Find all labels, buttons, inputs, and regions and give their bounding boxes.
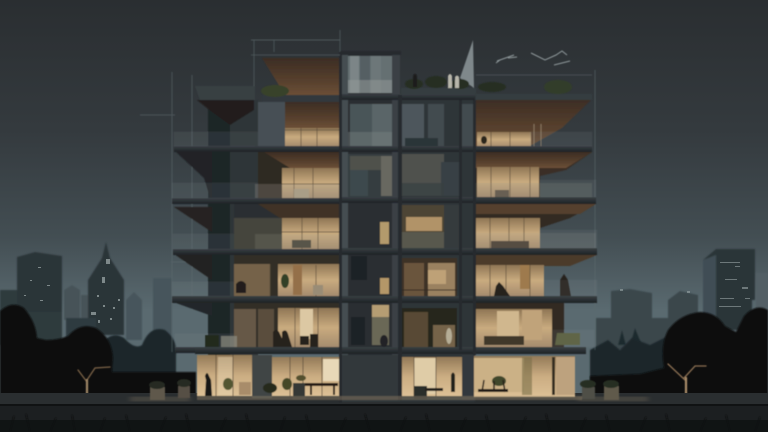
right wing: floor 3: [476, 204, 596, 249]
right wing: floor 4 soffit: [476, 152, 592, 197]
entrance lights on ground: [197, 396, 582, 400]
left wing: dark columns: [208, 105, 230, 355]
pavement: [0, 393, 768, 405]
left wing: floor 3: [234, 204, 340, 249]
right wing: balcony glass rails: [530, 132, 597, 347]
right wing: floor 1: [476, 303, 580, 347]
skyline: left city silhouettes: [0, 242, 172, 345]
skyline: right city silhouettes: [596, 249, 768, 350]
planter pots: [149, 379, 619, 400]
roof: terrace slabs: [401, 88, 592, 100]
skyline: left building lights: [24, 259, 120, 323]
left wing: outer slabs and undersides: [172, 146, 258, 353]
ground floor: concrete pier: [252, 355, 272, 398]
left wing: floor 4 window: [255, 168, 340, 198]
ground floor: left glazing: [197, 355, 252, 396]
right wing: top terrace soffit: [476, 99, 592, 146]
mid-ground tree line: right: [590, 335, 690, 395]
pavement light pools: [130, 397, 648, 401]
central tower: cap: [340, 51, 401, 55]
right wing: floor 4 window: [476, 167, 592, 197]
right wing: ground floor: [474, 356, 575, 397]
pavement edge and foreground ground: [0, 404, 768, 432]
central tower: horizontal slabs: [340, 94, 477, 354]
left wing: concrete tower piece: [258, 102, 285, 146]
central tower: ground floor lobby: [340, 355, 474, 402]
mid-ground tree line: left: [100, 329, 176, 395]
central tower: left column: [340, 52, 400, 402]
right wing: floor 5 window: [477, 124, 541, 147]
left wing: floor 4 soffit: [258, 152, 340, 198]
left wing: floor 5 ceiling: [285, 102, 340, 128]
birds: [496, 51, 570, 65]
central tower: mid windows column: [348, 104, 392, 347]
left wing: outer balcony backdrop: [208, 100, 258, 356]
scaffolding masts: [140, 30, 595, 352]
left wing: floor 1: [205, 303, 340, 347]
left wing: floor 5 window: [285, 128, 340, 146]
central tower: right column windows: [402, 104, 473, 347]
left wing: top cantilever box: [195, 86, 255, 125]
central tower: vertical piers: [339, 52, 476, 402]
foreground tree: right lit trunk: [668, 364, 706, 397]
central tower: top glazing: [348, 56, 392, 93]
roof: glass wedge sculpture: [460, 40, 474, 88]
foreground trees: right dark mass: [590, 308, 768, 395]
foreground grass: [10, 414, 760, 432]
building: [140, 30, 619, 402]
foreground tree: left lit trunk: [78, 367, 110, 397]
left wing: top terrace wood soffit: [262, 58, 340, 95]
roof: figures: [413, 74, 459, 88]
left wing: floor 2: [234, 255, 340, 296]
skyline: right building lights: [620, 262, 750, 307]
roof: planting: [261, 76, 572, 97]
right wing: floor 2: [476, 255, 597, 296]
roof: railing: [251, 40, 592, 75]
ground floor: centre-left glazing: [263, 357, 340, 400]
right wing: slabs: [476, 146, 597, 354]
central tower: concrete core: [400, 88, 475, 402]
foreground trees: left dark mass: [0, 305, 196, 395]
left wing: top terrace slab: [262, 95, 340, 102]
left wing: balcony glass rails: [172, 132, 258, 347]
